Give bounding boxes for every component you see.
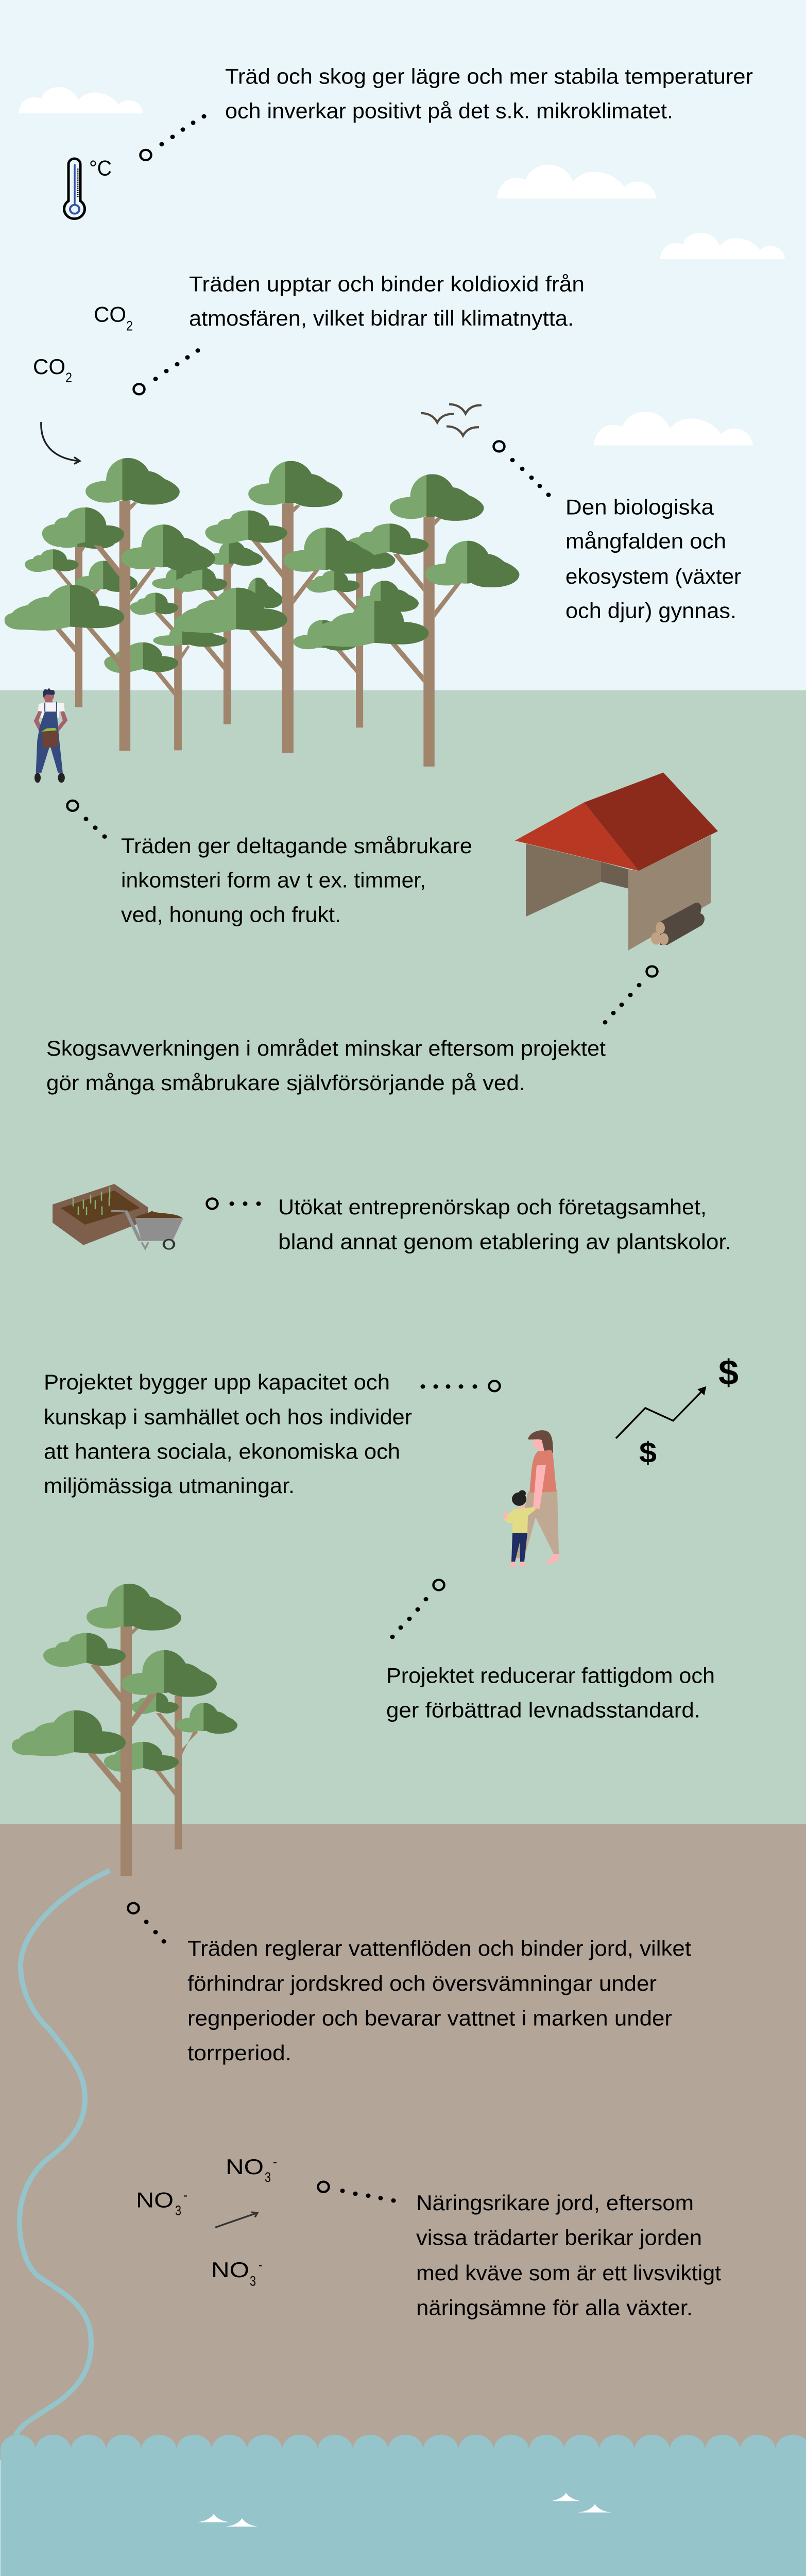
text: water regulation: Träden reglerar vattenflöden och binder jord, vilket bbox=[187, 1937, 691, 1961]
small tree bbox=[104, 1692, 237, 1850]
label: NO3 top: NO bbox=[226, 2155, 264, 2179]
tree: centre large bbox=[174, 461, 378, 753]
label: CO2 upper: CO bbox=[94, 302, 126, 327]
text: carbon dioxide: atmosfären, vilket bidrar till klimatnytta. bbox=[189, 307, 574, 331]
tree: third bbox=[104, 563, 227, 750]
text: microclimate bbox=[225, 64, 753, 123]
connector: biodiversity bbox=[493, 441, 551, 497]
text: deforestation: gör många småbrukare självförsörjande på ved. bbox=[46, 1071, 525, 1095]
label: CO2 lower: 2 bbox=[65, 370, 72, 385]
water with scalloped waves bbox=[1, 2435, 806, 2576]
soil band bbox=[0, 1824, 806, 2460]
text: nitrogen: med kväve som är ett livsviktigt bbox=[416, 2261, 721, 2285]
text: capacity building: miljömässiga utmaningar. bbox=[44, 1474, 295, 1498]
icon: shed with logs bbox=[515, 772, 718, 951]
chart: rising income arrow with dollar signs: $ bbox=[718, 1352, 739, 1392]
farmer with basket bbox=[34, 688, 67, 783]
tree: right large bbox=[308, 474, 519, 767]
label: NO3 left bbox=[136, 2187, 187, 2218]
label: NO3 bottom bbox=[211, 2257, 262, 2289]
text: water regulation: regnperioder och bevarar vattnet i marken under bbox=[187, 2006, 672, 2030]
connector: capacity building bbox=[420, 1381, 500, 1391]
text: capacity building: att hantera sociala, ekonomiska och bbox=[44, 1440, 400, 1464]
sky background bbox=[0, 0, 806, 690]
text: income: Träden ger deltagande småbrukare bbox=[121, 834, 472, 858]
connector: poverty reduction bbox=[390, 1580, 444, 1639]
text: poverty reduction bbox=[386, 1664, 715, 1722]
label: CO2 upper: 2 bbox=[126, 318, 133, 333]
label: NO3 bottom: NO bbox=[211, 2258, 249, 2282]
connector: carbon dioxide bbox=[134, 348, 200, 394]
green ground band bbox=[0, 690, 806, 1824]
connector: water regulation bbox=[128, 1903, 166, 1944]
connector: deforestation bbox=[603, 967, 657, 1025]
cloud 3 bbox=[660, 233, 785, 259]
text: capacity building: Projektet bygger upp kapacitet och bbox=[44, 1370, 390, 1395]
icon: birds bbox=[421, 404, 482, 436]
text: biodiversity: och djur) gynnas. bbox=[565, 599, 736, 623]
tree: back left bbox=[25, 526, 138, 707]
label: NO3 bottom: 3 bbox=[250, 2273, 256, 2289]
tree: left large bbox=[5, 458, 215, 751]
icon: thermometer bbox=[64, 157, 112, 219]
connector: income bbox=[67, 801, 107, 839]
label: NO3 bottom: - bbox=[259, 2257, 262, 2273]
text: capacity building bbox=[44, 1370, 412, 1498]
mother and child bbox=[504, 1430, 559, 1566]
child bbox=[504, 1490, 536, 1566]
chart: rising income arrow with dollar signs: $ bbox=[639, 1437, 657, 1469]
text: poverty reduction: ger förbättrad levnadsstandard. bbox=[386, 1699, 700, 1722]
text: poverty reduction: Projektet reducerar fattigdom och bbox=[386, 1664, 715, 1688]
text: nitrogen: Näringsrikare jord, eftersom bbox=[416, 2191, 694, 2215]
text: capacity building: kunskap i samhället och hos individer bbox=[44, 1405, 412, 1429]
whitecaps left bbox=[197, 2514, 259, 2527]
woman bbox=[515, 1430, 559, 1564]
text: nitrogen: näringsämne för alla växter. bbox=[416, 2296, 693, 2320]
tree: back right bbox=[293, 538, 419, 727]
text: entrepreneurship bbox=[278, 1195, 731, 1254]
label: CO2 lower bbox=[33, 355, 72, 385]
tree: back middle bbox=[202, 541, 283, 724]
text: income: ved, honung och frukt. bbox=[121, 903, 341, 927]
text: carbon dioxide bbox=[189, 273, 585, 331]
text: entrepreneurship: bland annat genom etablering av plantskolor. bbox=[278, 1230, 731, 1254]
text: biodiversity: mångfalden och bbox=[565, 530, 726, 553]
label: NO3 left: - bbox=[183, 2187, 187, 2202]
text: biodiversity: ekosystem (växter bbox=[565, 565, 741, 589]
lower trees bbox=[12, 1584, 237, 1876]
text: entrepreneurship: Utökat entreprenörskap och företagsamhet, bbox=[278, 1195, 707, 1219]
text: water regulation bbox=[187, 1937, 691, 2065]
text: nitrogen: vissa trädarter berikar jorden bbox=[416, 2226, 702, 2250]
connector: entrepreneurship bbox=[207, 1198, 261, 1209]
label: CO2 upper bbox=[94, 302, 133, 333]
label: NO3 left: NO bbox=[136, 2189, 174, 2212]
large tree bbox=[12, 1584, 217, 1876]
icon: thermometer: °C bbox=[89, 157, 112, 180]
text: carbon dioxide: Träden upptar och binder koldioxid från bbox=[189, 273, 585, 296]
text: income: inkomsteri form av t ex. timmer, bbox=[121, 868, 426, 892]
whitecaps right bbox=[549, 2493, 611, 2513]
cloud 2 bbox=[497, 165, 656, 198]
connector: microclimate bbox=[140, 114, 206, 160]
text: microclimate: Träd och skog ger lägre och mer stabila temperaturer bbox=[225, 64, 753, 89]
text: water regulation: torrperiod. bbox=[187, 2041, 291, 2065]
label: CO2 lower: CO bbox=[33, 355, 65, 379]
text: biodiversity: Den biologiska bbox=[565, 495, 714, 519]
cloud 4 bbox=[594, 412, 753, 445]
label: NO3 top: - bbox=[273, 2154, 277, 2170]
label: NO3 left: 3 bbox=[175, 2202, 181, 2218]
label: NO3 top: 3 bbox=[265, 2170, 271, 2185]
cloud 1 bbox=[19, 87, 143, 113]
text: water regulation: förhindrar jordskred och översvämningar under bbox=[187, 1972, 657, 1996]
label: NO3 top bbox=[226, 2154, 277, 2185]
text: nitrogen bbox=[416, 2191, 721, 2320]
text: biodiversity bbox=[565, 495, 741, 623]
stream of water through soil bbox=[15, 1871, 110, 2435]
connector: nitrogen bbox=[318, 2182, 396, 2202]
forest of trees bbox=[5, 458, 519, 767]
text: income bbox=[121, 834, 472, 927]
arrow: CO2 into trees bbox=[41, 422, 80, 464]
text: deforestation bbox=[46, 1037, 606, 1095]
arrow: nitrogen bbox=[215, 2212, 258, 2227]
chart: rising income arrow with dollar signs bbox=[616, 1352, 739, 1469]
text: deforestation: Skogsavverkningen i området minskar eftersom projektet bbox=[46, 1037, 606, 1061]
icon: plant nursery and wheelbarrow bbox=[53, 1184, 183, 1249]
text: microclimate: och inverkar positivt på det s.k. mikroklimatet. bbox=[225, 99, 673, 123]
